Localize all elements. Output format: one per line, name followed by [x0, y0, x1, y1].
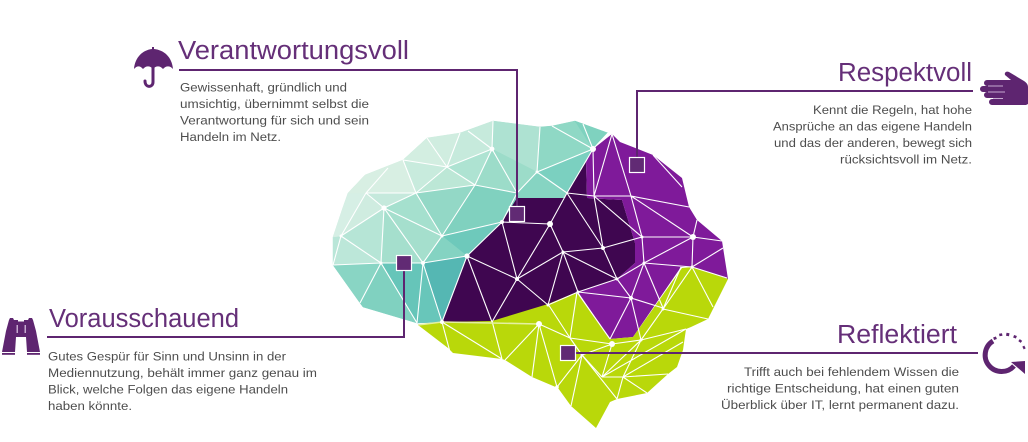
icon: hand: [983, 72, 1028, 105]
connector: Reflektiert: [560, 346, 978, 360]
node dots: [340, 146, 696, 389]
brain region: purple: [578, 134, 728, 339]
connector: Verantwortungsvoll: [179, 70, 524, 222]
mesh lines: [333, 121, 727, 406]
brain region: teal: [333, 121, 608, 323]
text: Respektvoll: rücksichtsvoll im Netz.: [840, 152, 972, 166]
text: Respektvoll: Kennt die Regeln, hat hohe: [813, 103, 972, 117]
text: Reflektiert: Trifft auch bei fehlendem Wissen die: [744, 365, 959, 379]
light highlighted edges: [418, 322, 539, 325]
heading: Verantwortungsvoll: Verantwortungsvoll: [178, 37, 409, 65]
text: Vorausschauend: Mediennutzung, behält immer ganz genau im: [48, 366, 317, 380]
text: Verantwortungsvoll: umsichtig, übernimmt selbst die: [180, 97, 369, 111]
icon: binoculars: [2, 318, 40, 355]
icon: umbrella: [134, 47, 173, 86]
brain region: green: [418, 267, 728, 428]
heading: Reflektiert: Reflektiert: [837, 321, 957, 349]
text: Reflektiert: Überblick über IT, lernt permanent dazu.: [721, 398, 959, 412]
text: Reflektiert: [721, 365, 959, 412]
text: Vorausschauend: [48, 350, 317, 413]
text: Vorausschauend: Blick, welche Folgen das eigene Handeln: [48, 382, 288, 396]
text: Respektvoll: Ansprüche an das eigene Handeln: [773, 120, 972, 134]
text: Respektvoll: und das der anderen, bewegt sich: [774, 136, 972, 150]
text: Verantwortungsvoll: Handeln im Netz.: [180, 130, 281, 144]
brain illustration: [333, 121, 728, 428]
heading: Vorausschauend: Vorausschauend: [49, 305, 239, 333]
icon: circular arrow: [985, 333, 1025, 374]
text: Vorausschauend: Gutes Gespür für Sinn und Unsinn in der: [48, 350, 286, 364]
text: Respektvoll: [773, 103, 972, 166]
text: Verantwortungsvoll: [180, 80, 369, 144]
text: Verantwortungsvoll: Gewissenhaft, gründlich und: [180, 80, 347, 94]
text: Reflektiert: richtige Entscheidung, hat einen guten: [727, 382, 959, 396]
connector: Vorausschauend: [47, 256, 412, 337]
text: Verantwortungsvoll: Verantwortung für sich und sein: [180, 114, 369, 128]
heading: Respektvoll: Respektvoll: [838, 59, 972, 87]
connector: Respektvoll: [630, 91, 973, 172]
brain region: dark purple: [442, 162, 635, 322]
text: Vorausschauend: haben könnte.: [48, 399, 132, 413]
